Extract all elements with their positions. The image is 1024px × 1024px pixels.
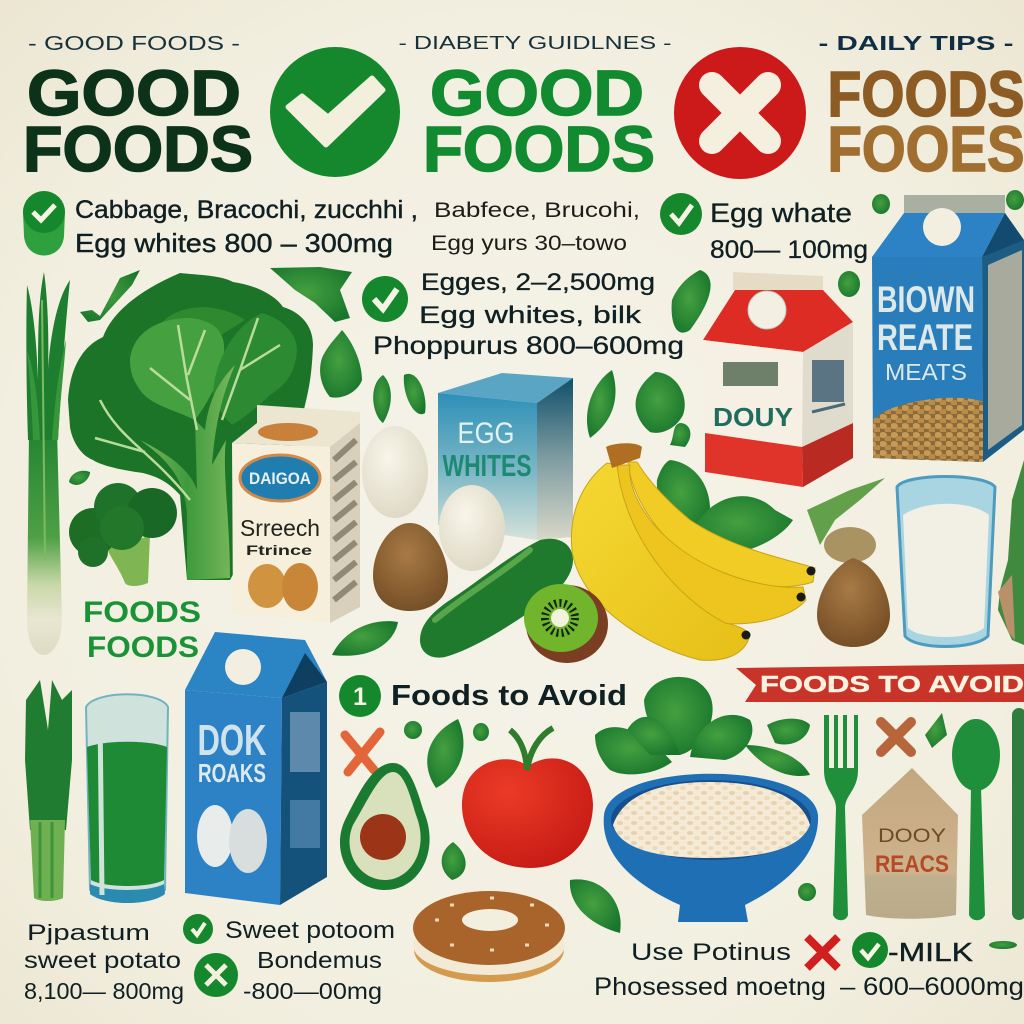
illustration: grain bag: DOOY (878, 826, 946, 847)
heading: foods to avoid (339, 675, 627, 717)
illustration: blue carton: MEATS (885, 359, 967, 385)
illustration: green juice glass (86, 694, 168, 903)
label: foods foods: FOODS (87, 631, 199, 664)
illustration: broccoli (69, 483, 177, 586)
heading: foods to avoid: 1 (353, 683, 367, 711)
illustration: nut carton (232, 405, 360, 623)
heading: daily tips column: - DAILY TIPS - (818, 33, 1014, 55)
text block: bondemus note: -800—00mg (243, 978, 382, 1004)
illustration: large leaves (657, 460, 793, 554)
text block: eggs and phosphorus note: Egges, 2–2,500mg (421, 269, 655, 296)
illustration: green spoon (952, 719, 1000, 920)
illustration: brown egg (373, 523, 448, 611)
illustration: large cabbage leaf (68, 273, 313, 580)
text block: processed meats note: – 600–6000mg (840, 973, 1024, 1001)
illustration: leek stalk lower (25, 680, 72, 901)
illustration: glass of milk (897, 476, 995, 646)
illustration: nut carton: DAIGOA (249, 469, 311, 488)
text block: potassium note: Pjpastum (27, 920, 150, 945)
icon: red cross (674, 47, 806, 179)
illustration: avocado (340, 763, 430, 890)
illustration: nut carton: Srreech (240, 515, 320, 541)
small leaves scattered (69, 190, 1024, 949)
illustration: blue carton (872, 195, 1024, 462)
text block: potassium note: sweet potato (24, 947, 181, 973)
illustration: nut carton: Ftrince (246, 542, 312, 558)
illustration: red apple (462, 728, 593, 868)
illustration: right edge vegetable (998, 460, 1024, 645)
text block: sweet potato note: Sweet potoom (225, 917, 395, 944)
text block: centre note: Babfece, Brucohi, (434, 199, 640, 222)
text block: centre note (431, 199, 640, 255)
illustration: blue dook carton: DOK (198, 716, 267, 765)
illustration: blue dook carton: ROAKS (198, 758, 266, 788)
illustration: rice bowl (604, 774, 818, 922)
text block: vegetables note (23, 191, 418, 258)
illustration: green fork (824, 715, 858, 920)
icon: brown cross (881, 722, 911, 752)
banner: foods to avoid (736, 664, 1024, 702)
illustration: herb sprig and brown vegetable (807, 478, 890, 647)
text block: eggs and phosphorus note (362, 269, 684, 360)
label: foods foods (83, 596, 201, 664)
illustration: egg whites box: EGG (458, 417, 514, 450)
text block: potassium note (24, 920, 184, 1004)
heading: good foods column: - GOOD FOODS - (28, 33, 240, 55)
heading: good foods column: FOODS (23, 113, 253, 185)
illustration: egg whites box (438, 373, 573, 571)
illustration: right edge cucumber (1012, 708, 1024, 920)
illustration: spinach bunch (595, 677, 810, 776)
heading: good foods column: GOOD (27, 57, 241, 129)
icon: small orange cross (345, 732, 380, 772)
text block: vegetables note: Cabbage, Bracochi, zucchhi , (75, 196, 418, 224)
heading: diabetes guidelines column: GOOD (430, 57, 644, 129)
illustration: egg whites box: WHITES (442, 448, 532, 483)
illustration: blue carton: REATE (877, 317, 973, 358)
illustration: blue dook carton (185, 632, 327, 905)
illustration: dairy carton: DOUY (713, 402, 793, 432)
text block: potassium note: 8,100— 800mg (24, 978, 184, 1004)
text block: use potinus note: -MILK (888, 937, 974, 967)
text block: egg whites note: 800— 100mg (710, 236, 868, 264)
text block: use potinus note (631, 932, 974, 968)
heading: diabetes guidelines column: FOODS (423, 113, 655, 185)
heading: foods to avoid: Foods to Avoid (391, 680, 627, 712)
illustration: bananas (571, 443, 816, 660)
illustration: blue carton: BIOWN (877, 279, 975, 320)
text block: processed meats note: Phosessed moetng (594, 973, 826, 1001)
illustration: cucumber (420, 539, 573, 658)
heading: daily tips column (818, 33, 1024, 185)
label: foods foods: FOODS (83, 596, 201, 629)
text block: use potinus note: Use Potinus (631, 939, 791, 966)
illustration: leek stalk (26, 272, 70, 655)
heading: good foods column (23, 33, 253, 185)
text block: eggs and phosphorus note: Egg whites, bilk (419, 302, 642, 329)
illustration: grain bag (862, 768, 958, 919)
illustration: white egg (362, 426, 428, 518)
illustration: dairy carton (703, 272, 853, 487)
text block: egg whites note: Egg whate (710, 198, 852, 228)
heading: diabetes guidelines column (398, 33, 672, 185)
text block: processed meats note (594, 973, 1024, 1001)
illustration: grain bag: REACS (875, 851, 949, 878)
text block: egg whites note (660, 193, 868, 264)
text block: vegetables note: Egg whites 800 – 300mg (75, 228, 393, 258)
text block: sweet potato note (183, 914, 395, 944)
text block: bondemus note (194, 947, 382, 1004)
illustration: bagel (413, 891, 565, 982)
text block: centre note: Egg yurs 30–towo (431, 232, 627, 255)
illustration: kiwi (524, 584, 608, 663)
icon: green check (270, 47, 400, 177)
text block: eggs and phosphorus note: Phoppurus 800–600mg (373, 332, 684, 360)
banner: foods to avoid: FOODS TO AVOID (760, 671, 1024, 697)
heading: diabetes guidelines column: - DIABETY GUIDLNES - (398, 33, 672, 53)
text block: bondemus note: Bondemus (257, 947, 382, 973)
